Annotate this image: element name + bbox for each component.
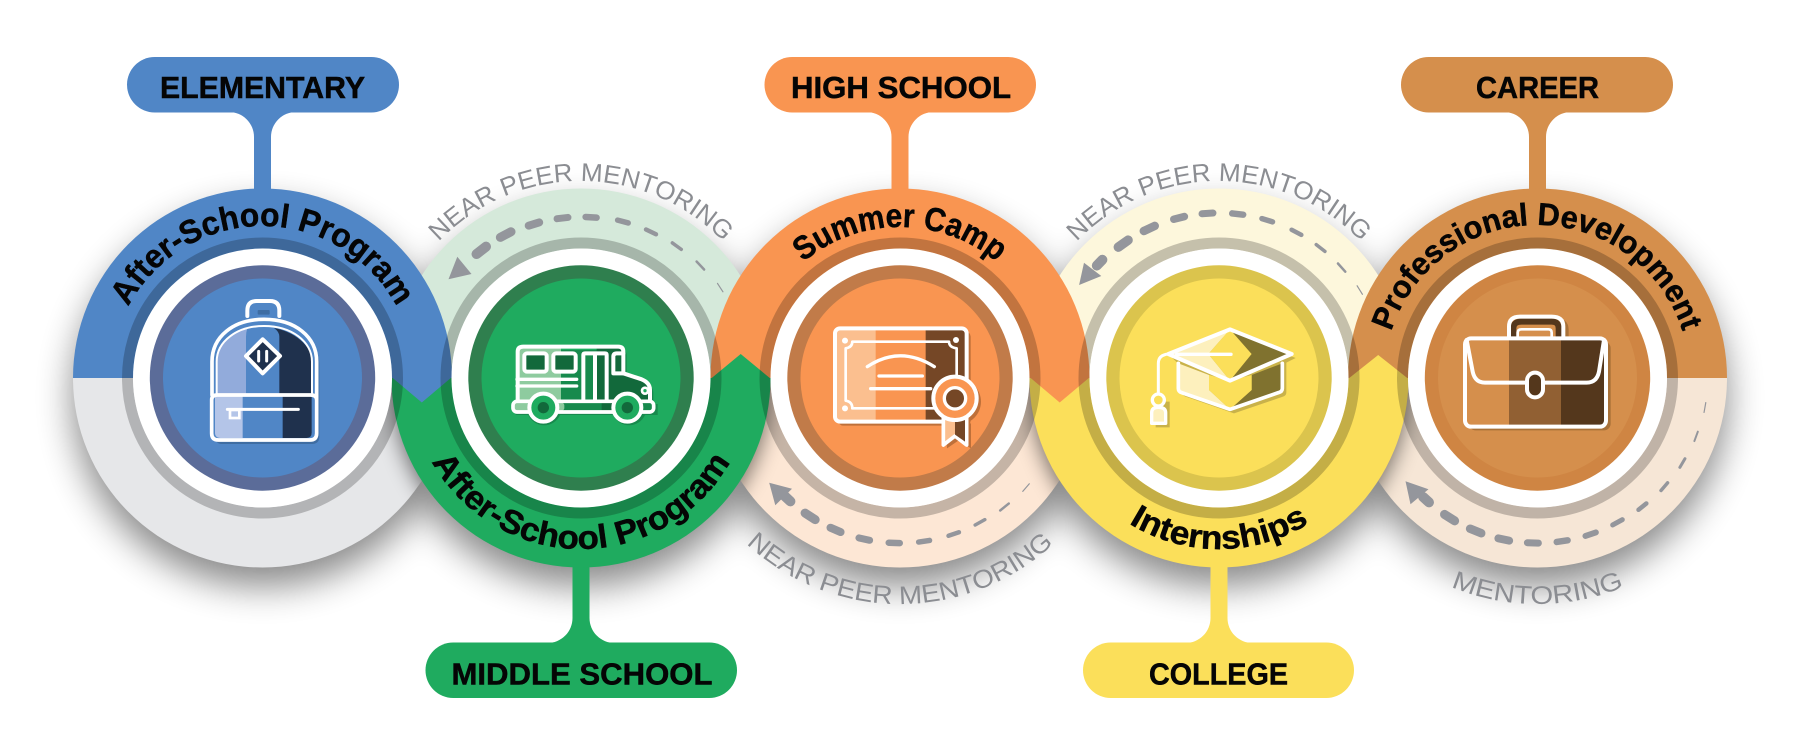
icon: briefcase [1465,317,1611,430]
white ring [770,248,1030,508]
white ring [1408,248,1667,508]
connector: high school label pill and stem: HIGH SCHOOL [791,70,1011,105]
arrow: near peer mentoring, high school to middle school [748,482,1050,604]
panel: after-school program, elementary [113,203,410,508]
icon: graduation cap [1152,329,1296,427]
connector: elementary label pill and stem [127,57,399,195]
label: mentoring: MENTORING [1453,571,1622,604]
inner fill [800,278,1000,478]
connector: college label pill and stem: COLLEGE [1149,656,1288,692]
inner ring [468,265,694,491]
icon: certificate with seal [835,328,981,448]
shadow cast on pale discs by the green and yellow discs [382,382,1418,496]
icon: school bus [513,347,658,425]
heading: internships: Internships [1130,504,1306,550]
connector: high school label pill and stem [764,57,1036,195]
arrow: mentoring, career to college [1406,402,1706,604]
panel: professional development, career [1371,202,1702,508]
pale half discs that hold the mentoring arrows [73,189,1727,568]
coloured half discs with interlocking chevrons [73,189,1727,568]
white ring [452,248,710,508]
panel: after-school program, middle school [432,248,730,550]
panel: summer camp, high school [770,208,1030,508]
white ring [1090,248,1348,508]
inner ring [1425,265,1650,491]
dashed arc with arrowhead [769,483,1029,543]
dashed arc with arrowhead [1079,213,1362,294]
connector: middle school label pill and stem [426,560,737,698]
heading: summer camp: Summer Camp [793,208,1004,260]
label: near peer mentoring: NEAR PEER MENTORING [748,532,1050,604]
inner fill [1120,278,1318,478]
translucent darker bands around the white rings [128,243,1672,513]
connector: middle school label pill and stem: MIDDLE SCHOOL [452,656,712,692]
label: near peer mentoring: NEAR PEER MENTORING [1066,163,1370,240]
inner fill [482,278,680,478]
connector: career label pill and stem: CAREER [1476,70,1599,105]
arrow: near peer mentoring, middle school to elementary [428,163,732,292]
heading: after-school program: After-School Program [432,456,730,550]
inner ring [787,265,1013,491]
heading: after-school program: After-School Program [113,203,410,306]
label: near peer mentoring: NEAR PEER MENTORING [428,163,732,240]
inner fill [1438,278,1637,478]
inner fill [163,278,362,478]
white ring [133,248,392,508]
panel: internships, college [1090,248,1348,550]
arrow: near peer mentoring, college to high school [1066,163,1370,295]
connector: elementary label pill and stem: ELEMENTARY [160,70,365,105]
soft drop shadow under the chain of circles [73,208,1727,586]
inner ring [1106,265,1332,491]
icon: backpack [212,301,319,444]
heading: professional development: Professional Development [1371,202,1702,332]
inner ring [150,265,375,491]
connector: career label pill and stem [1401,57,1673,195]
connector: college label pill and stem [1083,560,1354,698]
dashed arc with arrowhead [1406,403,1706,543]
dashed arc with arrowhead [448,217,723,292]
